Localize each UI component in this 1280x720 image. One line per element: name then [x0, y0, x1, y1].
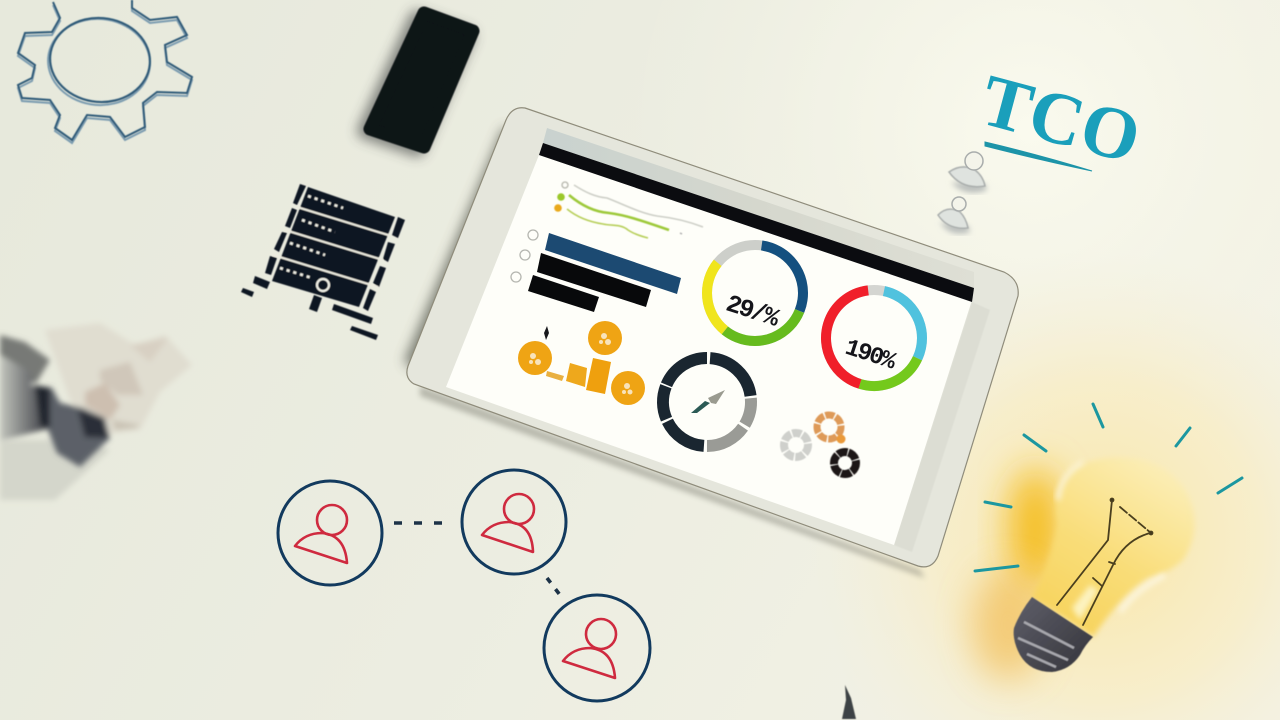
icon: outlined gear [18, 0, 192, 143]
bar chart [528, 233, 681, 312]
gauge dial [646, 341, 768, 463]
connector dashes [394, 523, 560, 595]
line chart [554, 182, 703, 238]
donut: 190%: 190% [841, 335, 899, 377]
orange bars and coins [518, 321, 645, 405]
screen [446, 143, 974, 545]
icon: pen tip [842, 685, 856, 719]
illustration: crumpled paper [0, 323, 192, 500]
icon: server rack [241, 184, 405, 340]
icon: light bulb [972, 404, 1242, 680]
tablet [404, 108, 1018, 578]
heading: TCO: TCO [973, 59, 1149, 180]
row icons [511, 230, 538, 282]
donut: 29%: 29/% [722, 290, 784, 334]
light rays [975, 404, 1242, 571]
small gears [784, 415, 856, 474]
bulb base [1014, 597, 1093, 672]
user node 3 [544, 595, 650, 701]
icon: small grey people [938, 152, 987, 234]
donut: 29% [687, 225, 823, 361]
user network [278, 470, 650, 701]
user node 1 [278, 481, 382, 585]
donut: 190% [810, 274, 938, 402]
icon: smartphone [365, 13, 473, 149]
filament [1057, 498, 1152, 625]
user node 2 [462, 470, 566, 574]
